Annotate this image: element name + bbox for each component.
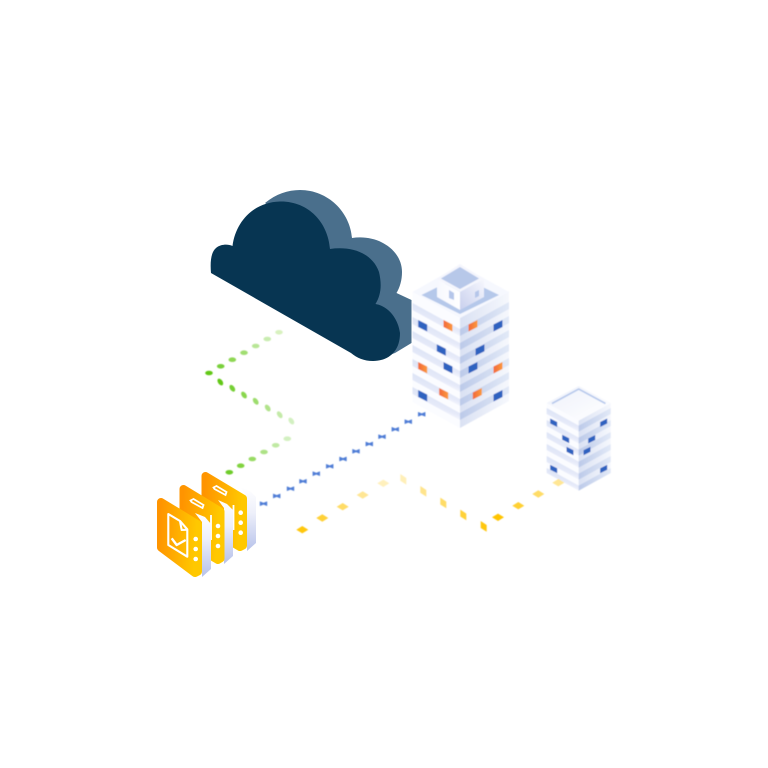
cloud: front face xyxy=(211,201,400,361)
small building xyxy=(547,386,611,491)
small building: windows xyxy=(550,418,607,473)
small building: roof edge xyxy=(552,389,606,404)
document: front xyxy=(161,502,211,577)
tall building: roof xyxy=(412,265,509,318)
green dotted path xyxy=(205,330,295,475)
document: middle xyxy=(184,489,233,564)
tall building: left face xyxy=(412,292,460,428)
blue dotted path xyxy=(260,412,425,506)
small building: left face xyxy=(547,403,579,491)
tall building: penthouse skylight xyxy=(441,267,479,289)
icon: three side dots xyxy=(193,537,198,561)
cloud xyxy=(211,190,412,361)
tall building: right face xyxy=(460,291,509,428)
cloud: extruded back xyxy=(265,190,412,361)
tall building: penthouse left wall xyxy=(437,279,460,310)
tall building: penthouse windows xyxy=(449,290,479,300)
small building: roof xyxy=(547,386,611,421)
tall building xyxy=(412,264,509,428)
tall building: orange windows xyxy=(418,320,502,399)
tall building: penthouse right wall xyxy=(460,279,484,310)
yellow dotted path xyxy=(296,474,564,533)
tall building: penthouse roof frame xyxy=(437,264,484,292)
document stack xyxy=(161,476,256,577)
icon: file with check mark xyxy=(168,514,187,557)
tall building: roof inset xyxy=(422,276,499,314)
document: back xyxy=(206,476,256,551)
tall building: blue windows xyxy=(418,320,502,401)
small building: right face xyxy=(579,403,611,491)
